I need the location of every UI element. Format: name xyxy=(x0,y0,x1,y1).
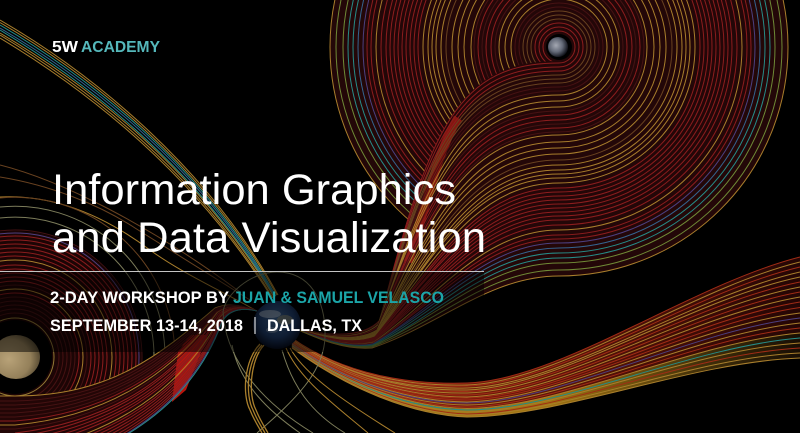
text band dim overlay xyxy=(0,272,484,352)
lower right band mustard edge xyxy=(292,333,800,417)
logo: 5W xyxy=(52,39,79,56)
logo: ACADEMY xyxy=(81,39,160,56)
saturn orbit rings xyxy=(0,230,142,433)
workshop presenters: JUAN & SAMUEL VELASCO xyxy=(233,289,444,307)
saturn band lines xyxy=(0,305,257,433)
moon band dense red edge xyxy=(408,118,458,262)
thin arcs converging on earth xyxy=(0,165,255,357)
date and place: DALLAS, TX xyxy=(267,317,362,335)
workshop presenters: 2-DAY WORKSHOP BY xyxy=(50,289,229,307)
saturn band base xyxy=(0,305,257,433)
moon band base xyxy=(290,61,559,348)
earth orbit loops xyxy=(223,272,395,433)
date and place xyxy=(50,317,362,335)
saturn band vivid red wedge xyxy=(172,335,208,402)
moon band lines xyxy=(290,63,559,348)
icon: earth xyxy=(253,301,301,349)
date and place: SEPTEMBER 13-14, 2018 xyxy=(50,317,243,335)
moon orbit rings xyxy=(330,0,788,276)
upper-left teal and gold band xyxy=(0,20,278,298)
lower right band base xyxy=(292,257,800,417)
divider rule xyxy=(0,271,484,272)
icon: saturn xyxy=(0,335,40,379)
title xyxy=(52,166,486,262)
title: Information Graphics xyxy=(52,166,456,214)
lower right band lines xyxy=(292,257,800,417)
workshop presenters xyxy=(50,289,444,307)
icon: moon xyxy=(546,34,572,60)
title: and Data Visualization xyxy=(52,214,486,262)
